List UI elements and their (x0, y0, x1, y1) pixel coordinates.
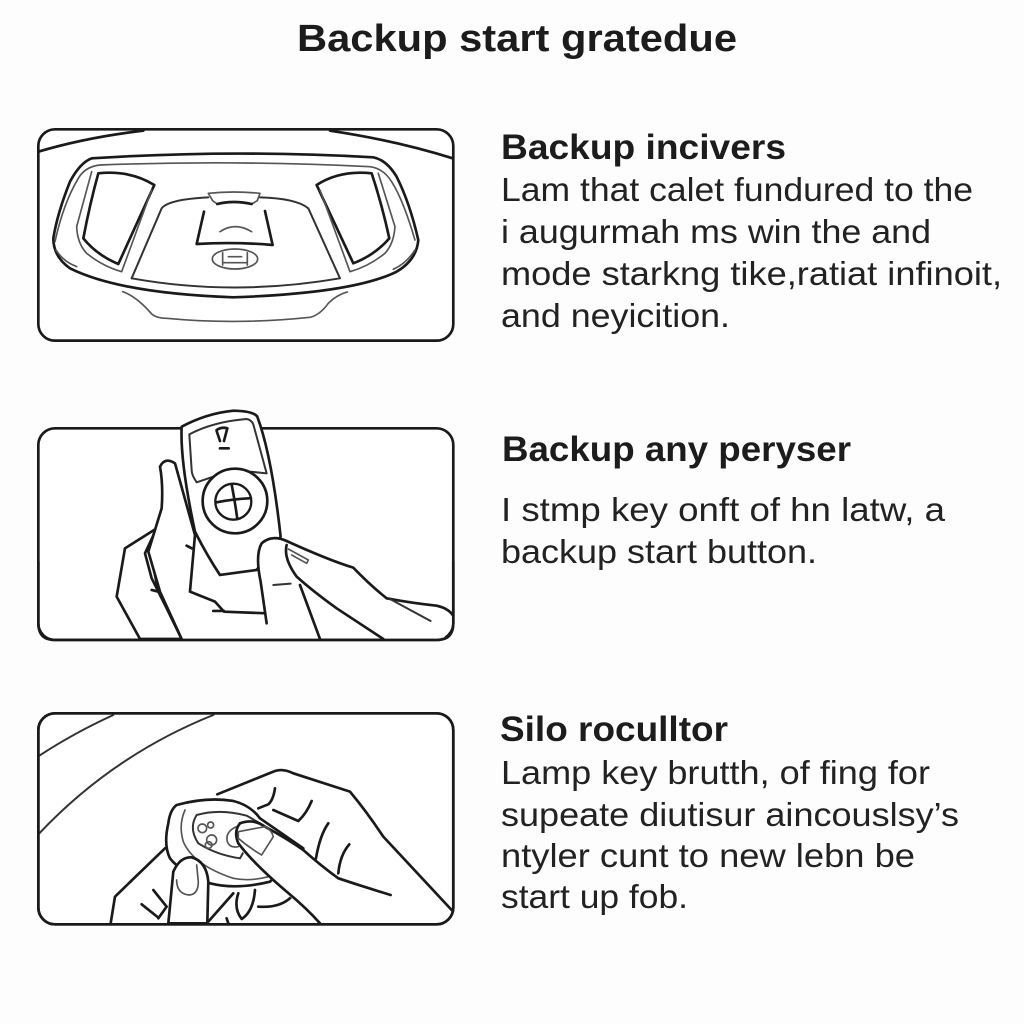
text block: backup any peryser (501, 491, 946, 570)
left hand (111, 848, 317, 923)
text block: backup any peryser: I stmp key onft of hn latw, a (501, 491, 946, 528)
heading: silo roculltor: Silo roculltor (500, 710, 728, 749)
text block: silo roculltor (501, 754, 959, 915)
thumb (168, 857, 208, 923)
panel: backup receiver illustration (38, 129, 453, 341)
text block: backup incivers: mode starkng tike,ratiat infinoit, (501, 255, 1002, 292)
key fob (166, 800, 303, 886)
left window (77, 172, 154, 272)
text block: silo roculltor: start up fob. (501, 878, 688, 915)
heading: backup incivers: Backup incivers (501, 128, 786, 167)
fob round button (203, 469, 267, 533)
text block: silo roculltor: Lamp key brutth, of fing for (501, 754, 930, 791)
central panel (132, 192, 340, 287)
text block: silo roculltor: ntyler cunt to new lebn be (501, 837, 915, 874)
text block: backup any peryser: backup start button. (501, 533, 817, 570)
text block: silo roculltor: supeate diutisur aincouslsy’s (501, 796, 959, 833)
key fob (181, 411, 281, 575)
frame lower edge (38, 562, 453, 640)
right hand back (217, 770, 452, 923)
fob buttons (198, 822, 238, 848)
right window (317, 173, 395, 272)
fob indicator icon (217, 428, 229, 448)
text block: backup incivers: and neyicition. (501, 297, 730, 334)
heading: backup any peryser: Backup any peryser (502, 430, 851, 469)
text block: backup incivers (501, 171, 1002, 334)
frame outline (38, 713, 453, 924)
holding hand (117, 461, 287, 639)
index finger (236, 821, 391, 923)
panel: pressing fob with fingers (38, 713, 453, 924)
text block: backup incivers: Lam that calet fundured to the (501, 171, 973, 208)
outer console shell (53, 154, 418, 297)
title: Backup start gratedue (297, 18, 737, 60)
panel: key fob held in hand (38, 411, 453, 640)
text block: backup incivers: i augurmah ms win the and (501, 213, 931, 250)
thumb (258, 538, 453, 639)
